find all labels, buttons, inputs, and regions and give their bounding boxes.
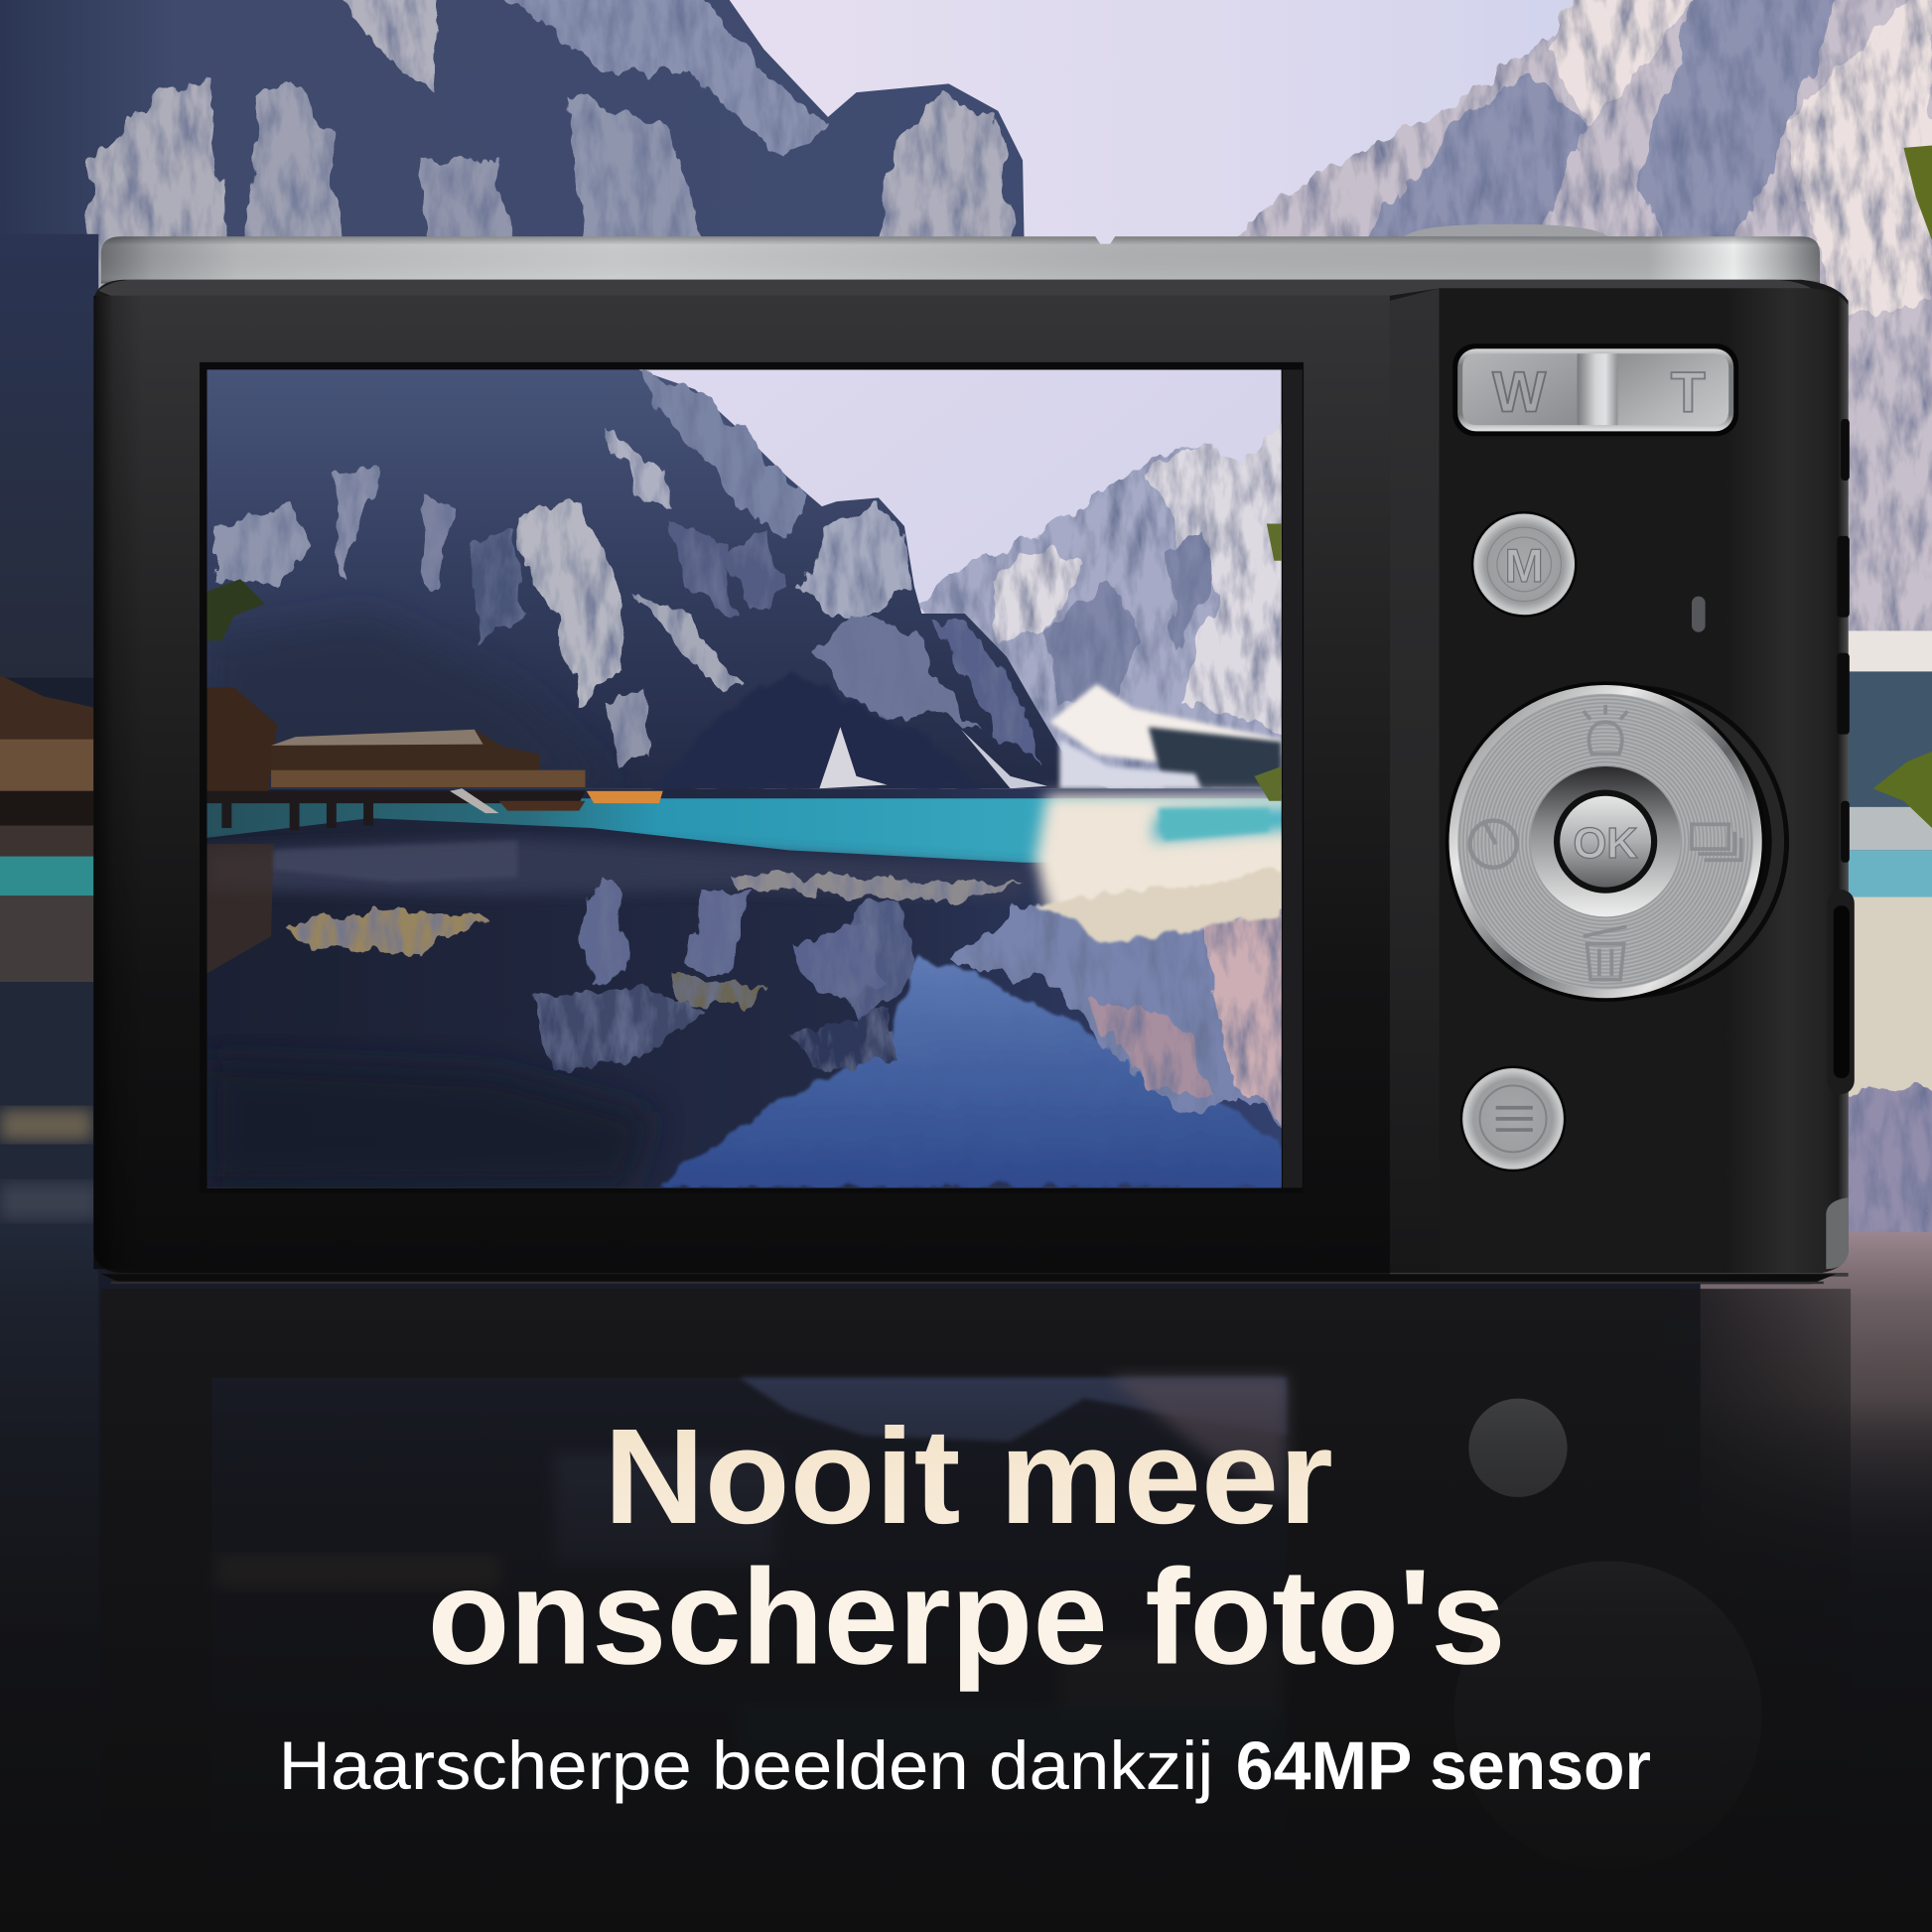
LCD screen photo [207, 369, 1307, 1187]
side buttons [1826, 419, 1855, 1269]
right control panel [1440, 288, 1849, 1274]
T label: T [1671, 361, 1706, 425]
subtitle regular: Haarscherpe beelden dankzij [278, 1728, 1213, 1804]
reflected d-pad [1453, 1561, 1762, 1869]
LCD screen bezel [200, 362, 1304, 1192]
background: rock faces [88, 0, 1023, 296]
d-pad silver disc [1449, 685, 1762, 998]
camera reflection on the floor [101, 1289, 1851, 1869]
d-pad housing [1476, 685, 1789, 998]
zoom rocker W/T [1452, 344, 1738, 436]
OK button [1554, 790, 1657, 894]
W label: W [1492, 361, 1546, 425]
background: sky [690, 0, 1651, 246]
icon: flash bulb [1584, 705, 1627, 755]
d-pad inner ring [1530, 766, 1681, 916]
icon: burst mode [1692, 824, 1741, 860]
d-pad: OK [1574, 820, 1638, 868]
reflected screen [211, 1378, 1287, 1864]
subtitle [278, 1728, 1651, 1804]
silver top plate [101, 236, 1820, 283]
menu button [1460, 1066, 1566, 1172]
background: left mountain [0, 0, 1026, 296]
camera body [93, 280, 1855, 1284]
status LED [1692, 597, 1706, 632]
mode button M: M [1505, 539, 1544, 592]
title [428, 1400, 1506, 1692]
d-pad [1446, 681, 1789, 1002]
mode button M [1471, 511, 1578, 618]
background: right shore strip [1836, 145, 1932, 1251]
background: lower right rock reflection [1701, 1232, 1932, 1601]
title line 1: Nooit meer [604, 1400, 1333, 1552]
background: right mountains [1207, 0, 1932, 813]
icon: self timer [1470, 821, 1517, 868]
icon: trash [1584, 926, 1626, 980]
grip strip [1390, 288, 1440, 1273]
shutter button on top [1405, 224, 1608, 236]
camera [93, 224, 1855, 1284]
subtitle bold: 64MP sensor [1236, 1728, 1651, 1804]
background: left shore strip [0, 234, 98, 1622]
reflected menu button [1468, 1399, 1568, 1497]
bottom dark fade [0, 1232, 1932, 1932]
title line 2: onscherpe foto's [428, 1540, 1506, 1692]
